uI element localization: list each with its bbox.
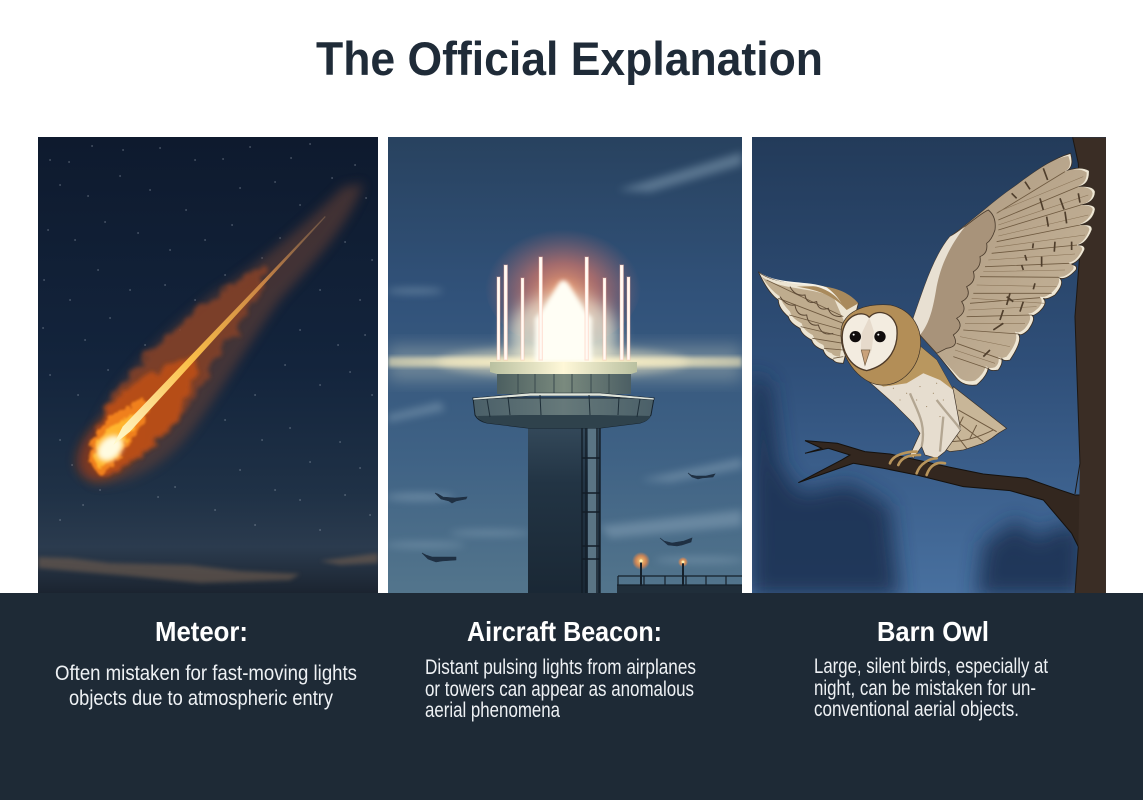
tower ladder xyxy=(582,425,600,593)
meteor description xyxy=(55,662,357,710)
caption: barn owl xyxy=(814,616,1048,721)
star field xyxy=(43,144,372,530)
aircraft beacon description xyxy=(425,656,696,722)
caption: aircraft beacon xyxy=(425,616,696,722)
caption band xyxy=(0,593,1143,800)
panel: barn owl illustration xyxy=(750,137,1106,597)
meteor description: Often mistaken for fast-moving lights xyxy=(55,662,357,685)
eyes xyxy=(850,331,861,342)
talons xyxy=(890,452,945,475)
beacon red halo xyxy=(488,232,638,337)
wispy clouds xyxy=(385,152,745,563)
tower shaft xyxy=(528,425,600,593)
body xyxy=(863,343,961,458)
wing coverts xyxy=(913,210,995,353)
meteor fireball and trail xyxy=(64,183,363,493)
tower lower gallery xyxy=(473,393,654,428)
owl head xyxy=(841,305,921,385)
control tower xyxy=(473,362,654,593)
title: The Official Explanation xyxy=(316,32,823,85)
barn owl description xyxy=(814,655,1048,721)
meteor heading: Meteor: xyxy=(155,616,248,647)
tail xyxy=(940,387,1007,452)
aircraft beacon heading: Aircraft Beacon: xyxy=(467,616,662,647)
horizontal light flare xyxy=(388,345,742,381)
panel: meteor illustration xyxy=(38,137,378,593)
barn owl description: conventional aerial objects. xyxy=(814,698,1019,721)
horizon clouds xyxy=(38,553,378,583)
airplanes xyxy=(422,473,715,562)
beacon light core xyxy=(508,280,618,377)
caption: meteor xyxy=(55,616,357,710)
right wing xyxy=(913,153,1095,385)
aircraft beacon description: or towers can appear as anomalous xyxy=(425,678,694,701)
aircraft beacon description: Distant pulsing lights from airplanes xyxy=(425,656,696,679)
panel: aircraft beacon illustration xyxy=(385,137,745,593)
tree trunk xyxy=(1073,137,1106,594)
barn owl heading: Barn Owl xyxy=(877,616,989,647)
rooftop railing and lamps xyxy=(617,552,742,593)
barn owl description: Large, silent birds, especially at xyxy=(814,655,1048,678)
meteor bright streak xyxy=(113,216,326,445)
beak xyxy=(861,350,870,365)
barn owl description: night, can be mistaken for un- xyxy=(814,677,1036,700)
left wing xyxy=(758,272,858,363)
blurred forest silhouettes xyxy=(750,373,1083,597)
wing feather shafts xyxy=(953,172,1081,369)
branch xyxy=(798,440,1080,547)
vertical light bars xyxy=(497,257,630,360)
meteor description: objects due to atmospheric entry xyxy=(69,687,333,710)
tower upper cab xyxy=(490,362,637,394)
facial disc xyxy=(842,313,897,371)
aircraft beacon description: aerial phenomena xyxy=(425,699,560,722)
